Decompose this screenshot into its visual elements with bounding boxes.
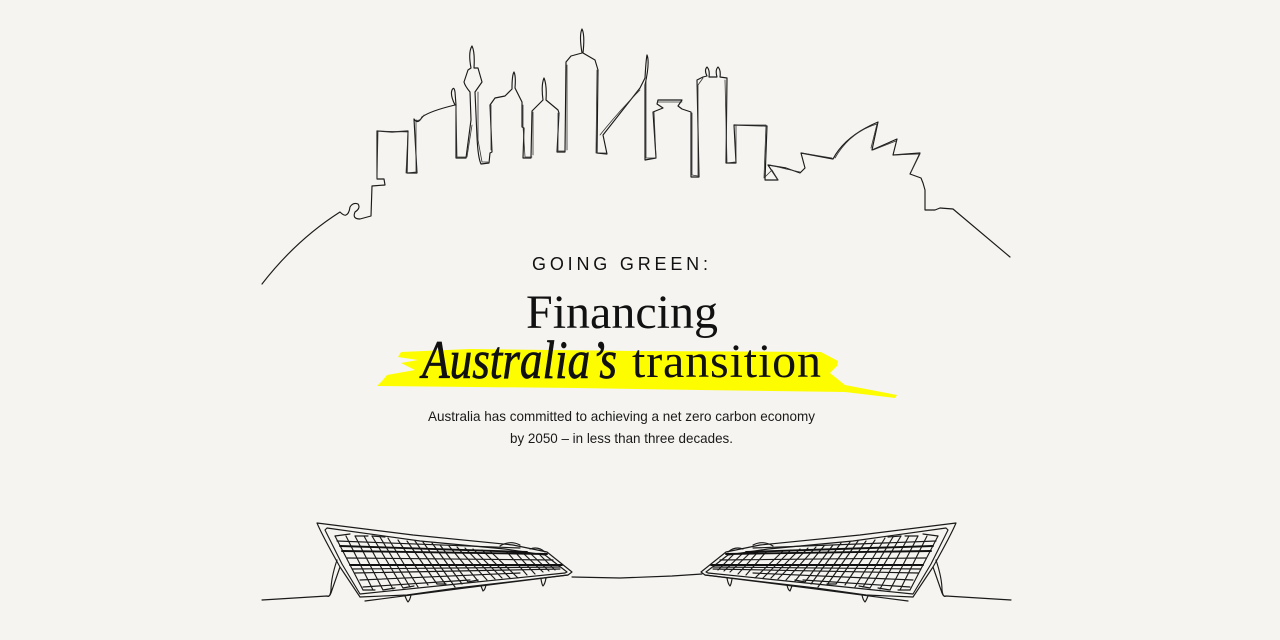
heading: transition: transition <box>632 335 821 388</box>
heading: kicker: GOING GREEN: <box>532 254 708 274</box>
body text: by 2050 – in less than three decades. <box>510 430 733 446</box>
icon: left solar panel with ground line <box>262 523 572 602</box>
connecting ground line between panels <box>572 574 702 578</box>
body text: Australia has committed to achieving a net zero carbon economy <box>428 408 815 424</box>
body text <box>428 408 815 446</box>
yellow brush highlight <box>377 349 897 398</box>
icon: right solar panel with ground line <box>701 523 1011 602</box>
heading: Financing: Financing <box>526 286 718 339</box>
skyline: one-line drawing of Sydney with Opera House <box>262 29 1010 284</box>
heading: Australia's: Australia’s <box>419 330 617 390</box>
